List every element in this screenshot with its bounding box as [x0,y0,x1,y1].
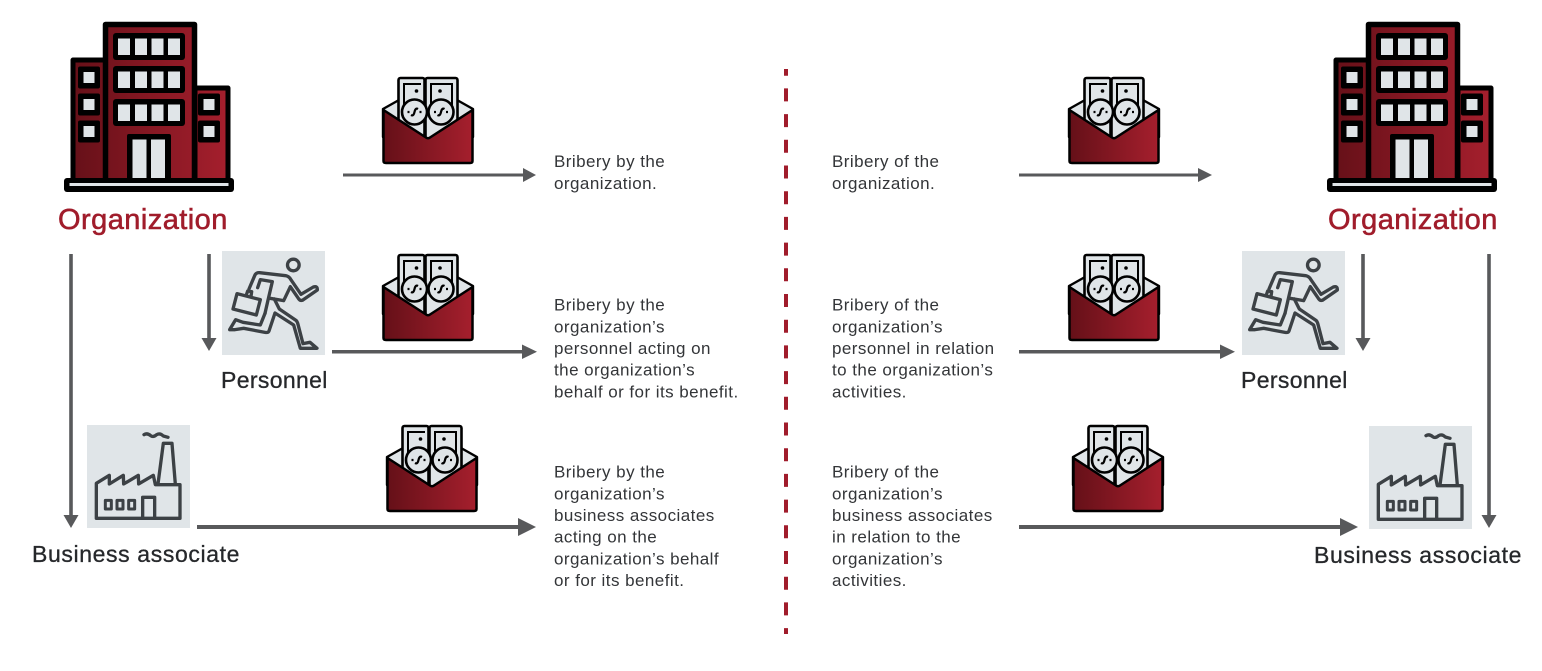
text: bribery of personnel: activities. [832,382,907,402]
left label: Personnel: Personnel [221,367,328,393]
left personnel icon [222,251,325,355]
envelope icon: row 3 left [387,426,477,511]
left arrow: organization to business associate [64,254,78,528]
arrow: bribery of the organization [1019,168,1212,182]
envelope icon: row 1 left [383,78,473,163]
text: bribery by personnel: Bribery by the [554,296,665,314]
text: bribery of business associates: organization’s [832,550,943,568]
text: bribery by business associates: business associates [554,506,715,525]
text: bribery of business associates: business associates [832,506,993,525]
right building icon [1327,24,1497,192]
envelope icon: row 2 left [383,255,473,340]
text: bribery of business associates: Bribery of the [832,462,939,482]
center dashed divider [784,69,788,634]
left factory icon [87,425,190,528]
right arrow: organization to personnel [1356,254,1370,351]
right label: Business associate: Business associate [1314,542,1522,568]
text: bribery by the organization: Bribery by the [554,152,665,171]
envelope icon: row 1 right [1069,78,1159,163]
text: bribery by the organization: organization. [554,174,657,193]
text: bribery by personnel: behalf or for its benefit. [554,382,739,402]
left label: Business associate: Business associate [32,541,240,567]
text: bribery of personnel: personnel in relation [832,339,995,358]
text: bribery by personnel: personnel acting on [554,339,711,358]
right arrow: organization to business associate [1482,254,1496,528]
text: bribery by personnel: organization’s [554,318,665,336]
text: bribery by business associates: organization’s [554,484,665,504]
text: bribery of the organization: Bribery of the [832,152,939,171]
left arrow: organization to personnel [202,254,216,351]
envelope icon: row 3 right [1073,426,1163,511]
envelope icon: row 2 right [1069,255,1159,340]
arrow: bribery by the organization [343,168,536,182]
text: bribery by business associates: Bribery by the [554,462,665,482]
arrow: bribery of personnel [1019,344,1235,359]
text: bribery by personnel: the organization’s [554,360,695,380]
text: bribery of personnel: Bribery of the [832,296,939,314]
text: bribery by business associates: organization’s behalf [554,550,719,568]
right heading: Organization: Organization [1328,204,1498,236]
left building icon [64,24,234,192]
arrow: bribery by personnel [332,344,537,359]
text: bribery of the organization: organization. [832,174,935,193]
right factory icon [1369,426,1472,529]
text: bribery of personnel: to the organization’s [832,360,993,380]
right personnel icon [1242,251,1345,355]
text: bribery of business associates: in relation to the [832,528,961,546]
left heading: Organization: Organization [58,204,228,236]
arrow: bribery by business associates [197,518,536,536]
text: bribery of personnel: organization’s [832,318,943,336]
arrow: bribery of business associates [1019,518,1358,536]
text: bribery of business associates: organization’s [832,484,943,504]
text: bribery by business associates: acting on the [554,528,657,546]
right label: Personnel: Personnel [1241,367,1348,393]
text: bribery of business associates: activities. [832,571,907,590]
text: bribery by business associates: or for its benefit. [554,571,684,590]
